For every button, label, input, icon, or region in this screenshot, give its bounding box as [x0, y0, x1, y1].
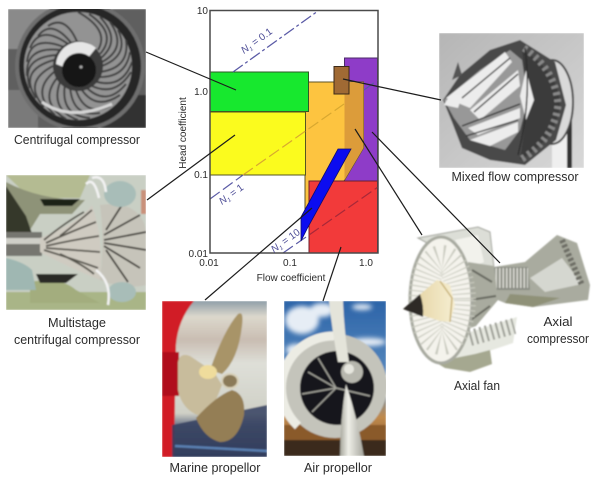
y axis title: Head coefficient	[178, 97, 189, 169]
label: axial compressor: Axial	[544, 314, 573, 329]
arrow: air propellor	[323, 247, 341, 301]
label: N1 = 0.1: 1	[249, 46, 255, 53]
label: N1 = 0.1: N	[239, 43, 252, 56]
photo: mixed flow compressor	[439, 33, 584, 168]
y axis ticks	[189, 6, 208, 260]
photo: centrifugal compressor	[8, 1, 146, 131]
engine cowl top	[418, 227, 494, 280]
label: N1 = 10: N	[269, 242, 282, 255]
region: marine propellor (blue)	[301, 149, 351, 241]
label: N1 = 0.1: = 0.1	[248, 26, 275, 50]
label: multistage centrifugal compressor	[14, 315, 141, 347]
arrow: marine propellor	[205, 208, 312, 300]
label: multistage centrifugal compressor: Multistage	[48, 315, 106, 330]
region: multistage (yellow)	[210, 112, 306, 175]
label: N1 = 1: N	[217, 194, 230, 207]
line: N1 = 10	[283, 187, 378, 253]
y axis ticks: 10	[197, 6, 208, 17]
arrow: centrifugal compressor	[146, 52, 236, 90]
region: axial compressor (purple)	[344, 58, 378, 181]
line: N1 = 1	[210, 80, 378, 199]
label: axial compressor	[527, 314, 590, 346]
engine mid section	[465, 262, 498, 330]
illustration: multistage centrifugal compressor	[6, 175, 146, 310]
region: centrifugal (green)	[210, 72, 308, 112]
label: N1 = 10: 1	[279, 245, 285, 252]
region: mixed flow (brown)	[334, 66, 349, 94]
y axis ticks: 0.01	[189, 249, 208, 260]
label: centrifugal compressor: Centrifugal compressor	[14, 132, 141, 147]
y axis ticks: 0.1	[194, 170, 208, 181]
illustration: jet engine (axial fan and axial compressor)	[403, 227, 590, 372]
region: axial fan (orange)	[305, 82, 364, 214]
label: N1 = 1: 1	[227, 197, 233, 204]
label: marine propellor: Marine propellor	[170, 460, 261, 475]
x axis ticks	[199, 258, 373, 269]
arrow: multistage centrifugal compressor	[147, 135, 235, 200]
fan blades	[423, 260, 461, 340]
arrow: axial compressor	[372, 132, 500, 263]
label: air propellor: Air propellor	[304, 460, 373, 475]
label: N1 = 1: = 1	[226, 182, 246, 201]
line: N1 = 0.1	[233, 11, 318, 72]
chart frame	[210, 10, 378, 253]
x axis ticks: 0.1	[283, 258, 297, 269]
arrow: mixed flow compressor	[343, 79, 441, 100]
engine cowl bottom	[453, 317, 517, 363]
engine core	[488, 235, 590, 307]
chart background	[210, 10, 378, 253]
label: axial compressor: compressor	[527, 331, 590, 346]
y axis ticks: 1.0	[194, 87, 208, 98]
photo: marine propellor	[162, 301, 267, 457]
fan ring	[410, 237, 472, 363]
label: axial fan: Axial fan	[454, 378, 500, 393]
x axis ticks: 1.0	[359, 258, 373, 269]
region: air propellor (red)	[309, 181, 378, 253]
nose cone	[403, 280, 455, 322]
chart: head vs flow coefficient	[178, 6, 378, 284]
x axis ticks: 0.01	[199, 258, 219, 269]
label: mixed flow compressor: Mixed flow compressor	[452, 169, 579, 184]
leader lines	[146, 52, 500, 301]
x axis title: Flow coefficient	[257, 273, 326, 284]
arrow: axial fan	[355, 129, 422, 235]
label: N1 = 10: = 10	[278, 227, 303, 249]
photo: air propellor	[281, 301, 387, 456]
overlap: orange and purple	[344, 82, 364, 180]
label: multistage centrifugal compressor: centrifugal compressor	[14, 332, 141, 347]
